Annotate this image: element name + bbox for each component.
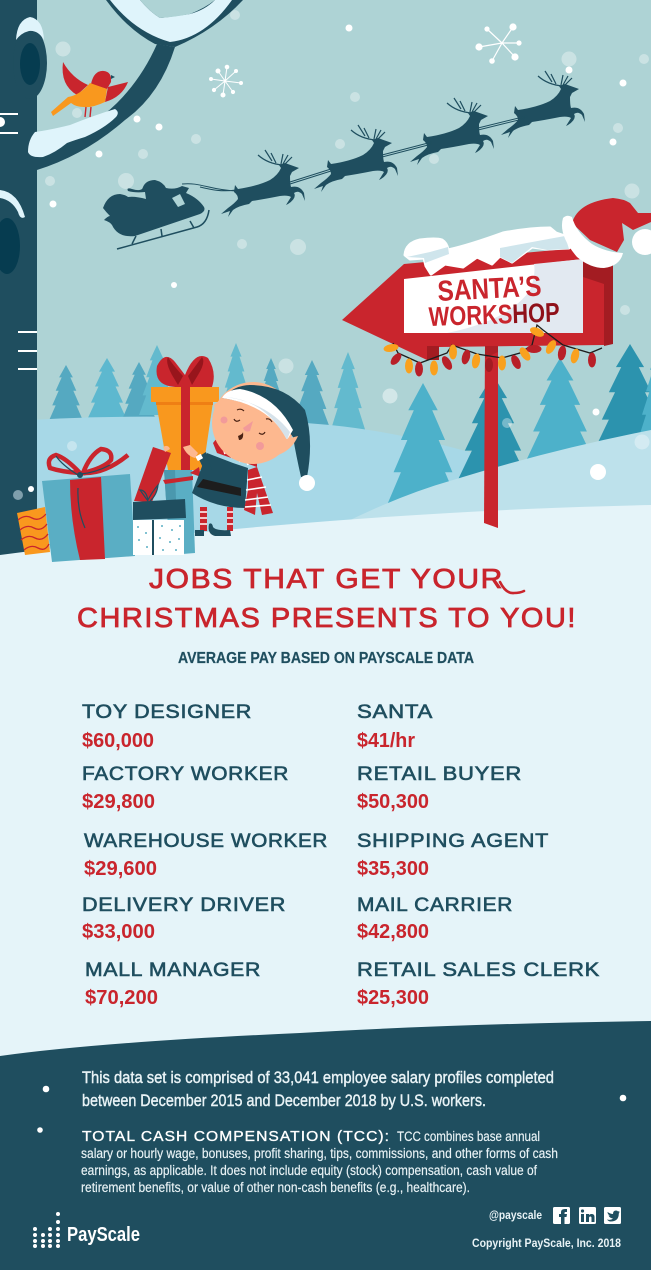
background pine trees	[49, 343, 365, 430]
main title: JOBS THAT GET YOUR	[149, 563, 504, 594]
gift: red tube	[134, 447, 171, 502]
subtitle: AVERAGE PAY BASED ON PAYSCALE DATA	[178, 650, 474, 667]
arrow sign	[342, 228, 613, 360]
left snow hill	[0, 417, 480, 560]
icon: facebook	[553, 1207, 570, 1224]
elf legs and shoes	[195, 507, 233, 536]
data set note: This data set is comprised of 33,041 employee salary profiles completed	[82, 1069, 554, 1087]
job: toy designer: $60,000	[82, 730, 154, 752]
gift: orange box	[151, 356, 219, 470]
icon: snowflake right	[476, 24, 521, 63]
data set note: between December 2015 and December 2018 by U.S. workers.	[82, 1092, 486, 1110]
TCC definition	[81, 1128, 558, 1195]
job: shipping agent: $35,300	[357, 858, 429, 880]
main title	[77, 563, 577, 633]
elf ear	[278, 436, 298, 455]
snow on branch	[28, 109, 118, 157]
job: delivery driver: $33,000	[82, 921, 155, 943]
main title: CHRISTMAS PRESENTS TO YOU!	[77, 602, 577, 633]
snowfall dots	[45, 10, 649, 406]
sign lettering: WORKSHOP	[428, 297, 560, 332]
job: retail sales clerk: $25,300	[357, 987, 429, 1009]
icon: linkedin	[579, 1207, 596, 1224]
TCC definition: TCC combines base annual	[397, 1129, 540, 1144]
job: warehouse worker: WAREHOUSE WORKER	[84, 831, 328, 852]
TCC definition: retirement benefits, or value of other non-cash benefits (e.g., healthcare).	[81, 1180, 470, 1195]
elf arm and hand	[163, 445, 212, 470]
sign lettering: SANTA’S	[437, 271, 542, 308]
tree trunk	[0, 0, 47, 556]
job: toy designer	[82, 702, 252, 752]
job: retail buyer: RETAIL BUYER	[357, 764, 522, 785]
PayScale logo: PayScale	[67, 1224, 140, 1246]
TCC definition: earnings, as applicable. It does not include equity (stock) compensation, cash value of	[81, 1163, 537, 1178]
foreground pine trees	[386, 344, 651, 507]
job: factory worker: $29,800	[82, 791, 155, 813]
copyright: Copyright PayScale, Inc. 2018	[472, 1236, 621, 1250]
social handle: @payscale	[489, 1208, 542, 1222]
top branch with snow	[106, 0, 243, 47]
job: retail sales clerk	[357, 960, 600, 1009]
icon: snowflake left	[210, 65, 242, 97]
job: shipping agent: SHIPPING AGENT	[357, 831, 549, 852]
job: warehouse worker	[84, 831, 328, 880]
job: santa: $41/hr	[357, 730, 415, 752]
sign board	[404, 259, 583, 333]
job: santa: SANTA	[357, 702, 433, 723]
job: warehouse worker: $29,600	[84, 858, 157, 880]
TCC definition: TOTAL CASH COMPENSATION (TCC):	[82, 1128, 390, 1145]
icon: red bird	[51, 62, 128, 117]
sign lettering	[428, 271, 560, 332]
job: retail buyer: $50,300	[357, 791, 429, 813]
icon: twitter	[604, 1207, 621, 1224]
footer panel	[0, 1021, 651, 1270]
job: santa	[357, 702, 433, 752]
job: retail buyer	[357, 764, 522, 813]
reindeer team	[221, 71, 585, 217]
string of lights	[383, 325, 602, 376]
job: mall manager: MALL MANAGER	[85, 960, 261, 981]
right snow hill	[340, 430, 651, 560]
snow ground	[0, 505, 651, 1060]
gift: tall teal box	[164, 470, 195, 555]
elf head	[212, 382, 294, 464]
curved branch	[37, 44, 175, 170]
gift: small orange box	[17, 507, 50, 555]
foreground dots	[67, 305, 650, 480]
gift: big teal box	[42, 449, 135, 562]
job: factory worker: FACTORY WORKER	[82, 764, 289, 785]
job: toy designer: TOY DESIGNER	[82, 702, 252, 723]
sign post	[484, 346, 498, 528]
santa sleigh silhouette	[103, 180, 236, 249]
job: mail carrier: MAIL CARRIER	[357, 895, 513, 916]
data set note	[82, 1069, 554, 1110]
footer dots	[37, 1086, 626, 1133]
job: shipping agent	[357, 831, 549, 880]
elf	[163, 382, 315, 536]
elf body	[192, 453, 248, 508]
gift: white box with navy lid	[133, 485, 186, 555]
PayScale logo	[33, 1212, 140, 1248]
TCC definition: salary or hourly wage, bonuses, profit sharing, tips, commissions, and other forms of cash	[81, 1146, 558, 1161]
snow on sign	[405, 228, 569, 274]
job: mall manager: $70,200	[85, 987, 158, 1009]
job: delivery driver	[82, 895, 286, 943]
job: mail carrier	[357, 895, 513, 943]
santa hat on sign	[562, 198, 651, 268]
job: delivery driver: DELIVERY DRIVER	[82, 895, 286, 916]
job: factory worker	[82, 764, 289, 813]
job: mail carrier: $42,800	[357, 921, 429, 943]
sky background	[0, 0, 651, 560]
job: retail sales clerk: RETAIL SALES CLERK	[357, 960, 600, 981]
gift ribbon tie	[163, 467, 201, 484]
elf scarf	[213, 438, 273, 515]
job list	[82, 702, 600, 1009]
elf hat	[222, 385, 315, 491]
job: mall manager	[85, 960, 261, 1009]
gifts pile	[17, 356, 219, 562]
